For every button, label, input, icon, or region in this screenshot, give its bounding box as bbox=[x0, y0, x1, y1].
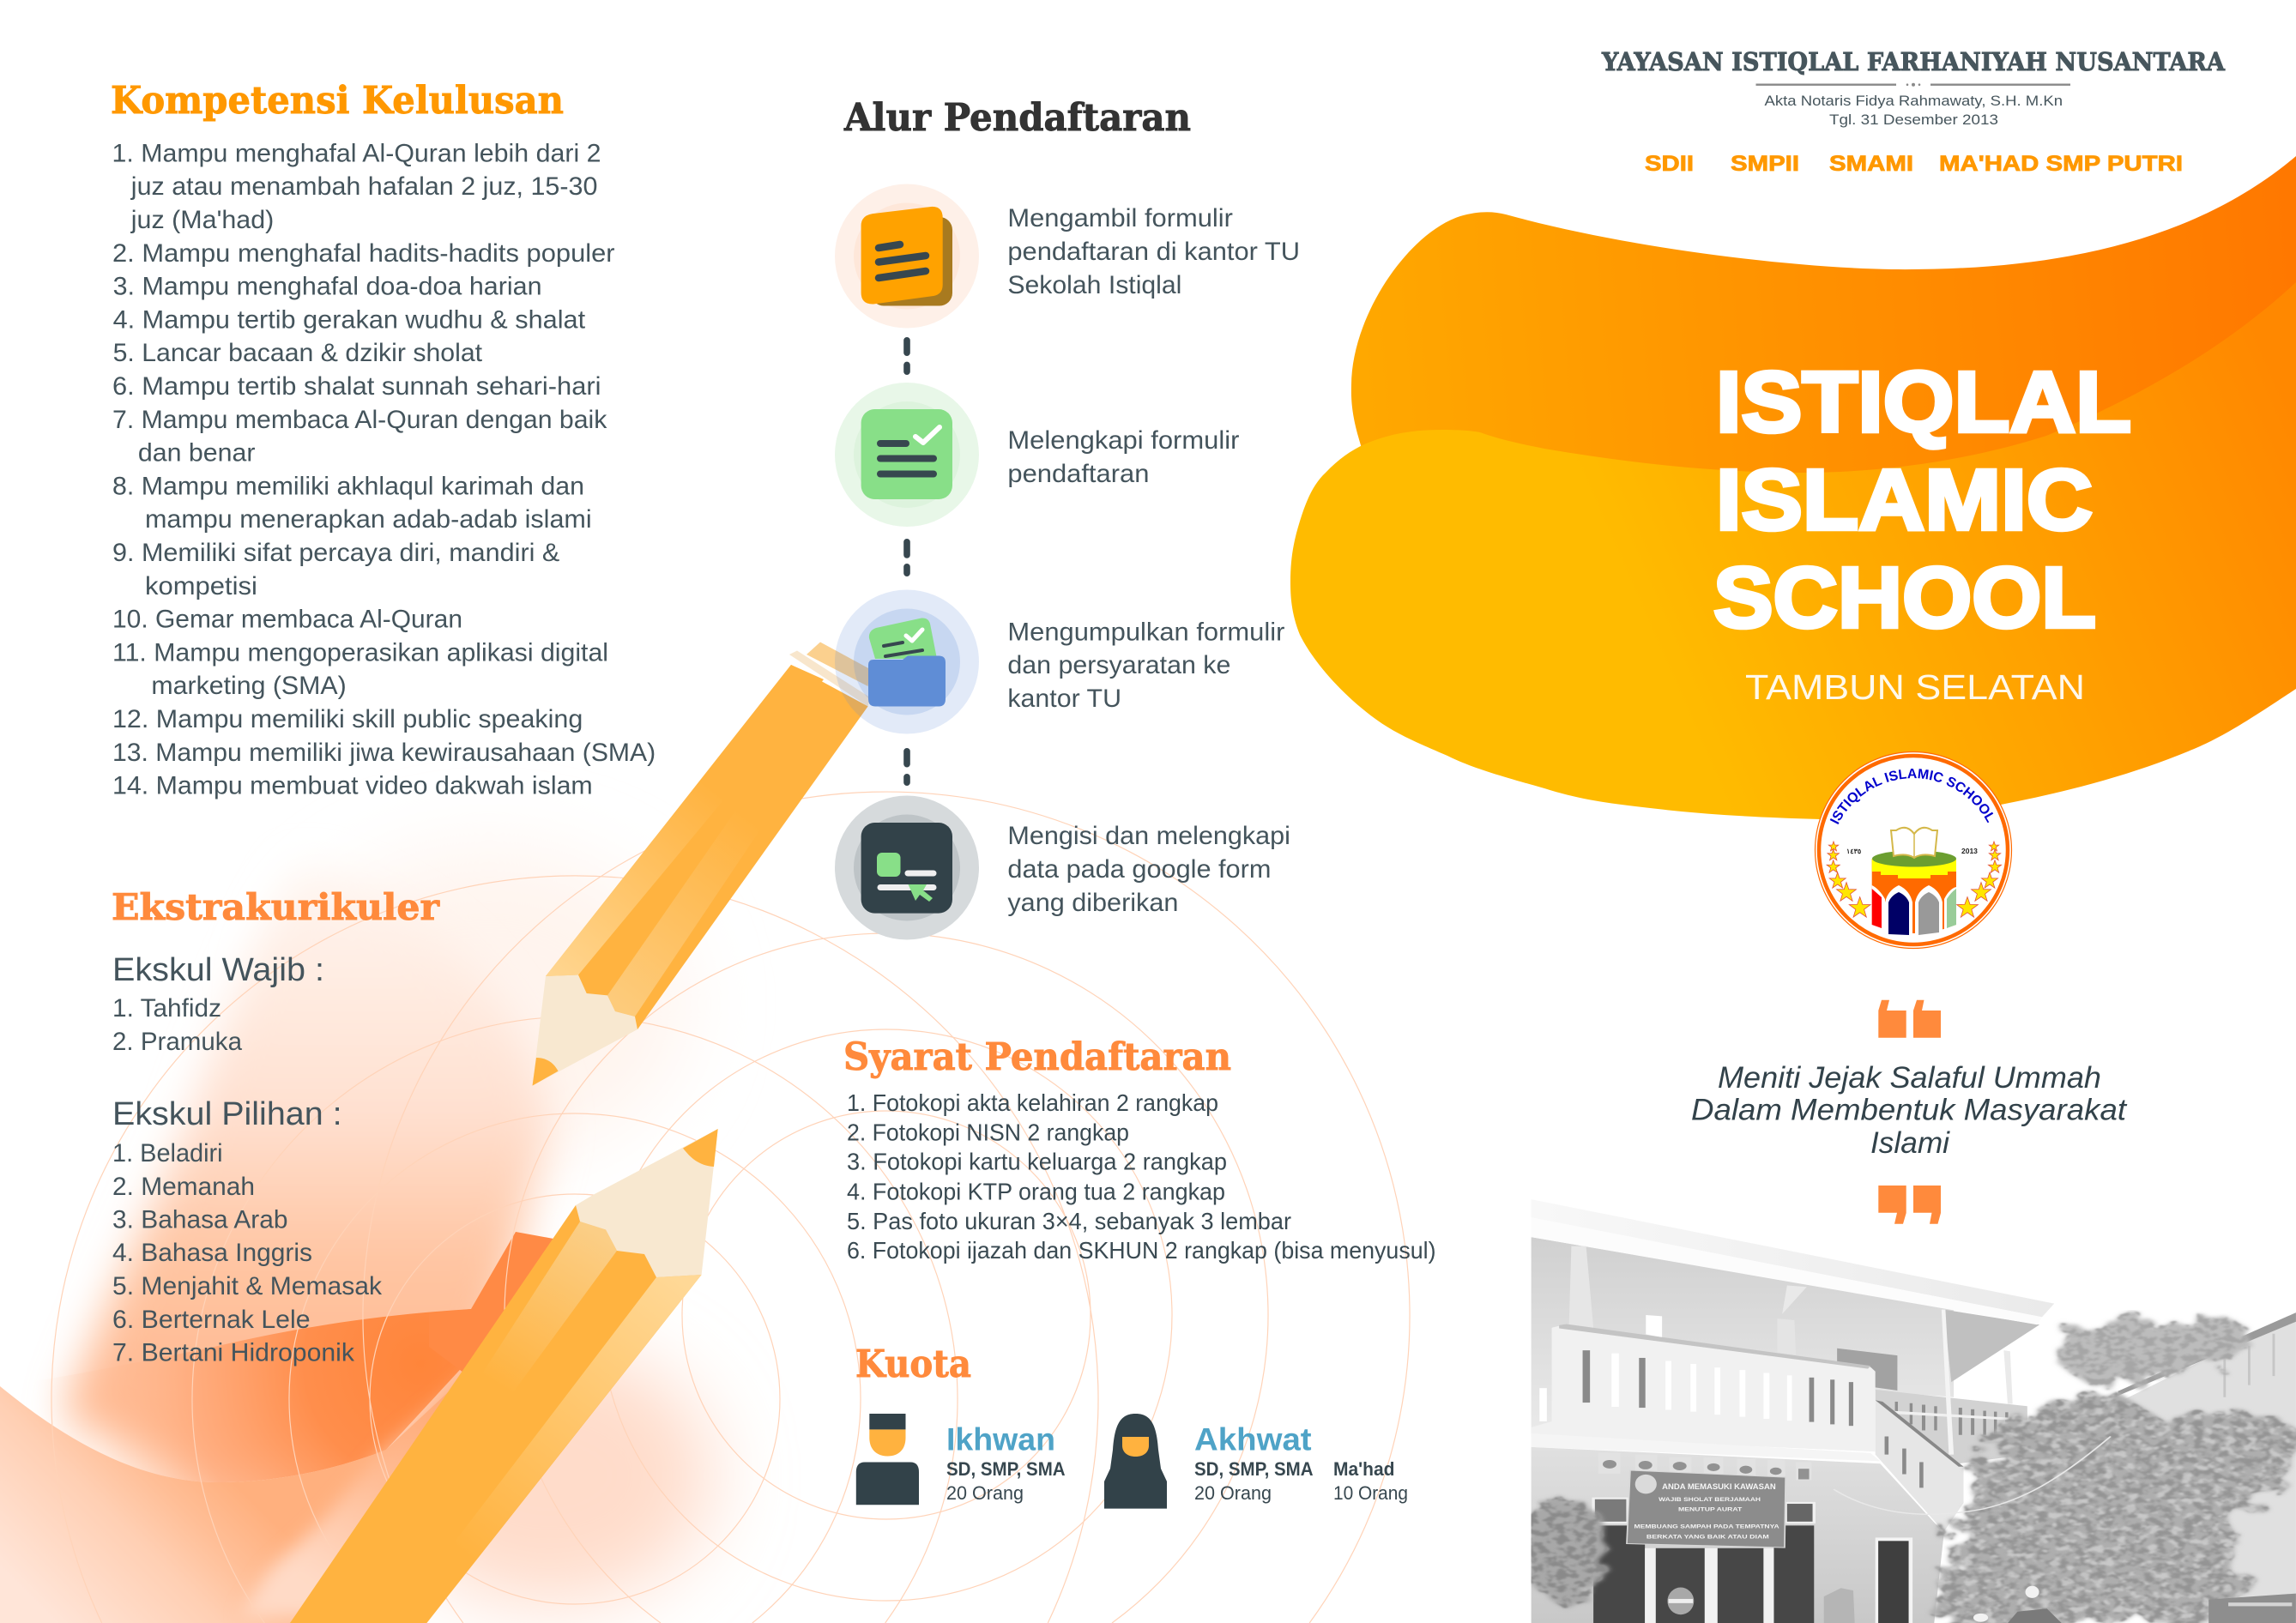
heading: Kuota bbox=[855, 1342, 971, 1386]
ekskul pilihan list bbox=[112, 1139, 383, 1367]
list: 1. Fotokopi akta kelahiran 2 rangkap bbox=[847, 1089, 1218, 1116]
heading: Kompetensi Kelulusan bbox=[111, 79, 564, 123]
panel: alur pendaftaran bbox=[835, 96, 1300, 940]
list: 6. Fotokopi ijazah dan SKHUN 2 rangkap (bisa menyusul) bbox=[847, 1237, 1436, 1264]
quote text: Dalam Membentuk Masyarakat bbox=[1691, 1093, 2127, 1127]
numbered list: 1. Mampu menghafal Al-Quran lebih dari 2 bbox=[112, 139, 601, 167]
list: 3. Fotokopi kartu keluarga 2 rangkap bbox=[847, 1149, 1227, 1175]
foundation name: YAYASAN ISTIQLAL FARHANIYAH NUSANTARA bbox=[1601, 47, 2225, 76]
quote text bbox=[1691, 1061, 2127, 1160]
icon: google form bbox=[835, 796, 979, 940]
text: Sekolah Istiqlal bbox=[1007, 271, 1181, 299]
logo: ISTIQLAL ISLAMIC SCHOOL bbox=[1829, 769, 1994, 824]
ikhwan label: Ikhwan bbox=[946, 1422, 1055, 1457]
title: SCHOOL bbox=[1713, 550, 2096, 646]
step 2 bbox=[835, 383, 1239, 527]
pencil: lower bbox=[290, 1129, 718, 1623]
ekskul pilihan list: 2. Memanah bbox=[112, 1173, 255, 1201]
numbered list: 12. Mampu memiliki skill public speaking bbox=[112, 705, 583, 733]
heading: Alur Pendaftaran bbox=[843, 96, 1191, 140]
text bbox=[1007, 822, 1290, 917]
photo: school building bbox=[1522, 1199, 2296, 1623]
ekskul pilihan list: 7. Bertani Hidroponik bbox=[112, 1338, 355, 1367]
numbered list: 4. Mampu tertib gerakan wudhu & shalat bbox=[113, 305, 586, 334]
ekskul pilihan list: 6. Berternak Lele bbox=[112, 1306, 311, 1334]
panel: kuota bbox=[855, 1342, 1408, 1509]
panel: ekstrakurikuler bbox=[112, 886, 440, 1367]
sign board: BERKATA YANG BAIK ATAU DIAM bbox=[1646, 1534, 1769, 1540]
icon: akhwat bbox=[1104, 1414, 1167, 1509]
text: kantor TU bbox=[1007, 685, 1121, 713]
text bbox=[1007, 426, 1239, 488]
numbered list: 2. Mampu menghafal hadits-hadits populer bbox=[112, 239, 615, 268]
icon: ikhwan bbox=[856, 1414, 919, 1505]
heading: Ekstrakurikuler bbox=[112, 886, 440, 928]
akhwat detail: 10 Orang bbox=[1333, 1482, 1408, 1504]
school units: SMPII bbox=[1731, 152, 1799, 176]
ornament divider bbox=[1755, 83, 2070, 87]
sign board: MEMBUANG SAMPAH PADA TEMPATNYA bbox=[1634, 1523, 1779, 1529]
step 1 bbox=[835, 184, 1300, 328]
subtitle: TAMBUN SELATAN bbox=[1745, 667, 2085, 707]
step 4 bbox=[835, 796, 1290, 940]
ekskul wajib list bbox=[112, 994, 242, 1056]
title: ISLAMIC bbox=[1716, 452, 2093, 548]
panel: header blobs bbox=[1290, 156, 2296, 819]
ekskul pilihan list: 1. Beladiri bbox=[112, 1139, 223, 1167]
logo: ١٤٣٥ bbox=[1846, 848, 1861, 855]
numbered list: 8. Mampu memiliki akhlaqul karimah dan bbox=[112, 472, 584, 500]
list: 4. Fotokopi KTP orang tua 2 rangkap bbox=[847, 1178, 1225, 1204]
school units: SMAMI bbox=[1829, 152, 1913, 176]
quote mark: close bbox=[1878, 1186, 1941, 1224]
numbered list: 10. Gemar membaca Al-Quran bbox=[112, 606, 462, 634]
text: yang diberikan bbox=[1007, 889, 1178, 917]
text: Melengkapi formulir bbox=[1007, 426, 1239, 455]
title: ISTIQLAL bbox=[1716, 354, 2131, 450]
akhwat label: Akhwat bbox=[1194, 1422, 1312, 1457]
akhwat detail bbox=[1194, 1458, 1408, 1504]
quote text: Islami bbox=[1870, 1126, 1950, 1160]
text: Mengisi dan melengkapi bbox=[1007, 822, 1290, 850]
step 3 bbox=[835, 590, 1284, 734]
text bbox=[1007, 204, 1300, 299]
date line: Tgl. 31 Desember 2013 bbox=[1829, 112, 1998, 128]
numbered list: juz atau menambah hafalan 2 juz, 15-30 bbox=[130, 172, 597, 201]
connector dots bbox=[903, 337, 910, 375]
ikhwan detail: SD, SMP, SMA bbox=[946, 1458, 1066, 1480]
background: concentric rings bbox=[51, 792, 1410, 1623]
title bbox=[1713, 354, 2131, 646]
ekskul wajib subheading: Ekskul Wajib : bbox=[112, 952, 324, 988]
pencil: upper bbox=[532, 642, 870, 1086]
akhwat detail: SD, SMP, SMA bbox=[1194, 1458, 1314, 1480]
akhwat detail: 20 Orang bbox=[1194, 1482, 1272, 1504]
logo bbox=[1814, 751, 2013, 949]
ikhwan detail bbox=[946, 1458, 1066, 1504]
school units: SDII bbox=[1645, 152, 1694, 176]
numbered list: 13. Mampu memiliki jiwa kewirausahaan (SMA) bbox=[112, 739, 656, 767]
numbered list: 3. Mampu menghafal doa-doa harian bbox=[113, 273, 542, 301]
sign board bbox=[1627, 1470, 1785, 1548]
ekskul pilihan subheading: Ekskul Pilihan : bbox=[112, 1096, 342, 1132]
numbered list: 7. Mampu membaca Al-Quran dengan baik bbox=[112, 406, 607, 434]
ekskul wajib list: 1. Tahfidz bbox=[112, 994, 221, 1023]
akhwat detail: Ma'had bbox=[1333, 1458, 1395, 1480]
notary line: Akta Notaris Fidya Rahmawaty, S.H. M.Kn bbox=[1764, 93, 2063, 109]
panel: yayasan header bbox=[1601, 47, 2225, 176]
text: dan persyaratan ke bbox=[1007, 651, 1230, 679]
background: soft orange swoosh bbox=[0, 849, 712, 1623]
ekskul pilihan list: 3. Bahasa Arab bbox=[112, 1206, 288, 1234]
back orange blob bbox=[1351, 156, 2296, 618]
numbered list bbox=[112, 139, 656, 800]
quote text: Meniti Jejak Salaful Ummah bbox=[1718, 1061, 2101, 1095]
sign board: WAJIB SHOLAT BERJAMAAH bbox=[1659, 1496, 1761, 1503]
icon: green checklist bbox=[835, 383, 979, 527]
icon: folder bbox=[835, 590, 979, 734]
icon: orange document bbox=[835, 184, 979, 328]
numbered list: 5. Lancar bacaan & dzikir sholat bbox=[113, 339, 483, 367]
heading: Syarat Pendaftaran bbox=[843, 1035, 1231, 1079]
numbered list: mampu menerapkan adab-adab islami bbox=[145, 505, 592, 534]
school units: MA'HAD SMP PUTRI bbox=[1939, 152, 2183, 176]
numbered list: 11. Mampu mengoperasikan aplikasi digital bbox=[112, 638, 608, 667]
quote mark: open bbox=[1878, 1000, 1941, 1038]
text: pendaftaran bbox=[1007, 460, 1149, 488]
ekskul wajib list: 2. Pramuka bbox=[112, 1028, 242, 1056]
numbered list: 9. Memiliki sifat percaya diri, mandiri & bbox=[112, 539, 559, 567]
numbered list: dan benar bbox=[138, 439, 256, 468]
ikhwan detail: 20 Orang bbox=[946, 1482, 1024, 1504]
numbered list: 6. Mampu tertib shalat sunnah sehari-hari bbox=[112, 372, 601, 401]
numbered list: marketing (SMA) bbox=[151, 672, 347, 700]
list: 2. Fotokopi NISN 2 rangkap bbox=[847, 1119, 1129, 1145]
list: 5. Pas foto ukuran 3×4, sebanyak 3 lembar bbox=[847, 1208, 1291, 1234]
text: Mengumpulkan formulir bbox=[1007, 618, 1284, 646]
panel: syarat pendaftaran bbox=[843, 1035, 1436, 1264]
panel: kompetensi kelulusan bbox=[111, 79, 656, 800]
list bbox=[847, 1089, 1436, 1264]
numbered list: juz (Ma'had) bbox=[130, 206, 274, 234]
ekskul pilihan list: 5. Menjahit & Memasak bbox=[112, 1272, 383, 1300]
logo: 2013 bbox=[1961, 847, 1978, 855]
connector dots bbox=[903, 748, 910, 786]
ekskul pilihan list: 4. Bahasa Inggris bbox=[112, 1239, 312, 1267]
front yellow blob bbox=[1290, 282, 2296, 819]
sign board: ANDA MEMASUKI KAWASAN bbox=[1662, 1482, 1776, 1491]
connector dots bbox=[903, 539, 910, 576]
text: Mengambil formulir bbox=[1007, 204, 1233, 232]
numbered list: 14. Mampu membuat video dakwah islam bbox=[112, 772, 593, 800]
numbered list: kompetisi bbox=[145, 572, 257, 600]
text bbox=[1007, 618, 1284, 713]
text: data pada google form bbox=[1007, 855, 1271, 884]
text: pendaftaran di kantor TU bbox=[1007, 238, 1300, 266]
school units bbox=[1645, 152, 2183, 176]
sign board: MENUTUP AURAT bbox=[1678, 1506, 1743, 1512]
